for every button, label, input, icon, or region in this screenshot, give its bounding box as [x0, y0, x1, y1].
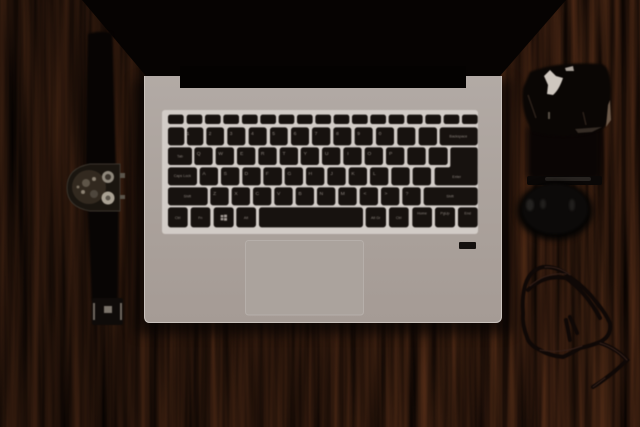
- keyboard: Alt Gr: [371, 216, 381, 220]
- key legends: F: [266, 171, 269, 177]
- key legends: B: [298, 191, 302, 197]
- key legends: 0: [379, 131, 382, 137]
- keyboard: Tab: [177, 154, 183, 158]
- key legends: 8: [336, 131, 339, 137]
- perfume bottle: [522, 63, 611, 185]
- key legends: C: [256, 191, 260, 197]
- keyboard: End: [464, 211, 471, 215]
- key legends: 5: [272, 131, 275, 137]
- key legends: Y: [304, 151, 308, 157]
- shift key row: [168, 188, 477, 205]
- wireless earbuds case: [517, 182, 593, 240]
- watch case: [67, 164, 125, 211]
- key legends: S: [224, 171, 228, 177]
- key legends: X: [234, 191, 238, 197]
- keyboard: [162, 110, 478, 234]
- key legends: <: [364, 191, 367, 197]
- keyboard: Home: [417, 211, 427, 215]
- key legends: [187, 131, 409, 197]
- keyboard well: [162, 110, 478, 234]
- key legends: L: [373, 171, 376, 177]
- fingerprint reader: [459, 242, 476, 249]
- number key row: [168, 128, 477, 145]
- key legends: A: [202, 171, 206, 177]
- bottle rim: [527, 176, 602, 185]
- key legends: T: [282, 151, 286, 157]
- key legends: I: [347, 151, 349, 157]
- cord bracelet: [523, 267, 627, 387]
- key legends: V: [277, 191, 281, 197]
- shadow under laptop: [134, 80, 512, 334]
- keyboard: Backspace: [449, 135, 467, 139]
- key legends: J: [330, 171, 333, 177]
- bottom key row: [168, 208, 477, 227]
- keyboard: Caps Lock: [174, 174, 191, 178]
- keyboard: Shift: [184, 195, 191, 199]
- home key row: [168, 148, 477, 185]
- glass highlights: [528, 66, 611, 133]
- strap: [86, 32, 119, 300]
- trackpad: [246, 240, 364, 315]
- key legends: Q: [197, 151, 201, 157]
- key legends: U: [325, 151, 329, 157]
- keyboard: PgUp: [440, 211, 450, 215]
- key legends: N: [320, 191, 324, 197]
- key legends: R: [261, 151, 265, 157]
- key legends: H: [309, 171, 313, 177]
- keyboard: Ctrl: [396, 216, 402, 220]
- key legends: G: [287, 171, 291, 177]
- key legends: 3: [230, 131, 233, 137]
- keyboard: Ctrl: [175, 216, 181, 220]
- function key row: [168, 115, 477, 124]
- key legends: D: [245, 171, 249, 177]
- keyboard: Alt: [244, 216, 248, 220]
- laptop screen lid: [82, 0, 566, 88]
- key legends: O: [367, 151, 371, 157]
- wristwatch: [67, 32, 125, 325]
- keyboard: Enter: [452, 175, 462, 179]
- key legends: 7: [315, 131, 318, 137]
- key legends: P: [389, 151, 393, 157]
- key legends: 9: [357, 131, 360, 137]
- keyboard: Fn: [198, 216, 202, 220]
- keyboard: Shift: [446, 195, 454, 199]
- laptop base: [144, 76, 502, 323]
- buckle: [92, 298, 123, 325]
- key legends: E: [240, 151, 244, 157]
- key legends: W: [218, 151, 223, 157]
- key legends: 6: [294, 131, 297, 137]
- key legends: K: [351, 171, 355, 177]
- key legends: M: [341, 191, 345, 197]
- key legends: 4: [251, 131, 254, 137]
- key legends: Z: [213, 191, 216, 197]
- qwerty key row: [168, 148, 447, 165]
- key legends: >: [385, 191, 388, 197]
- key legends: ?: [406, 191, 409, 197]
- key legends: 2: [209, 131, 212, 137]
- icon: windows logo: [221, 215, 227, 221]
- key legends: 1: [187, 131, 190, 137]
